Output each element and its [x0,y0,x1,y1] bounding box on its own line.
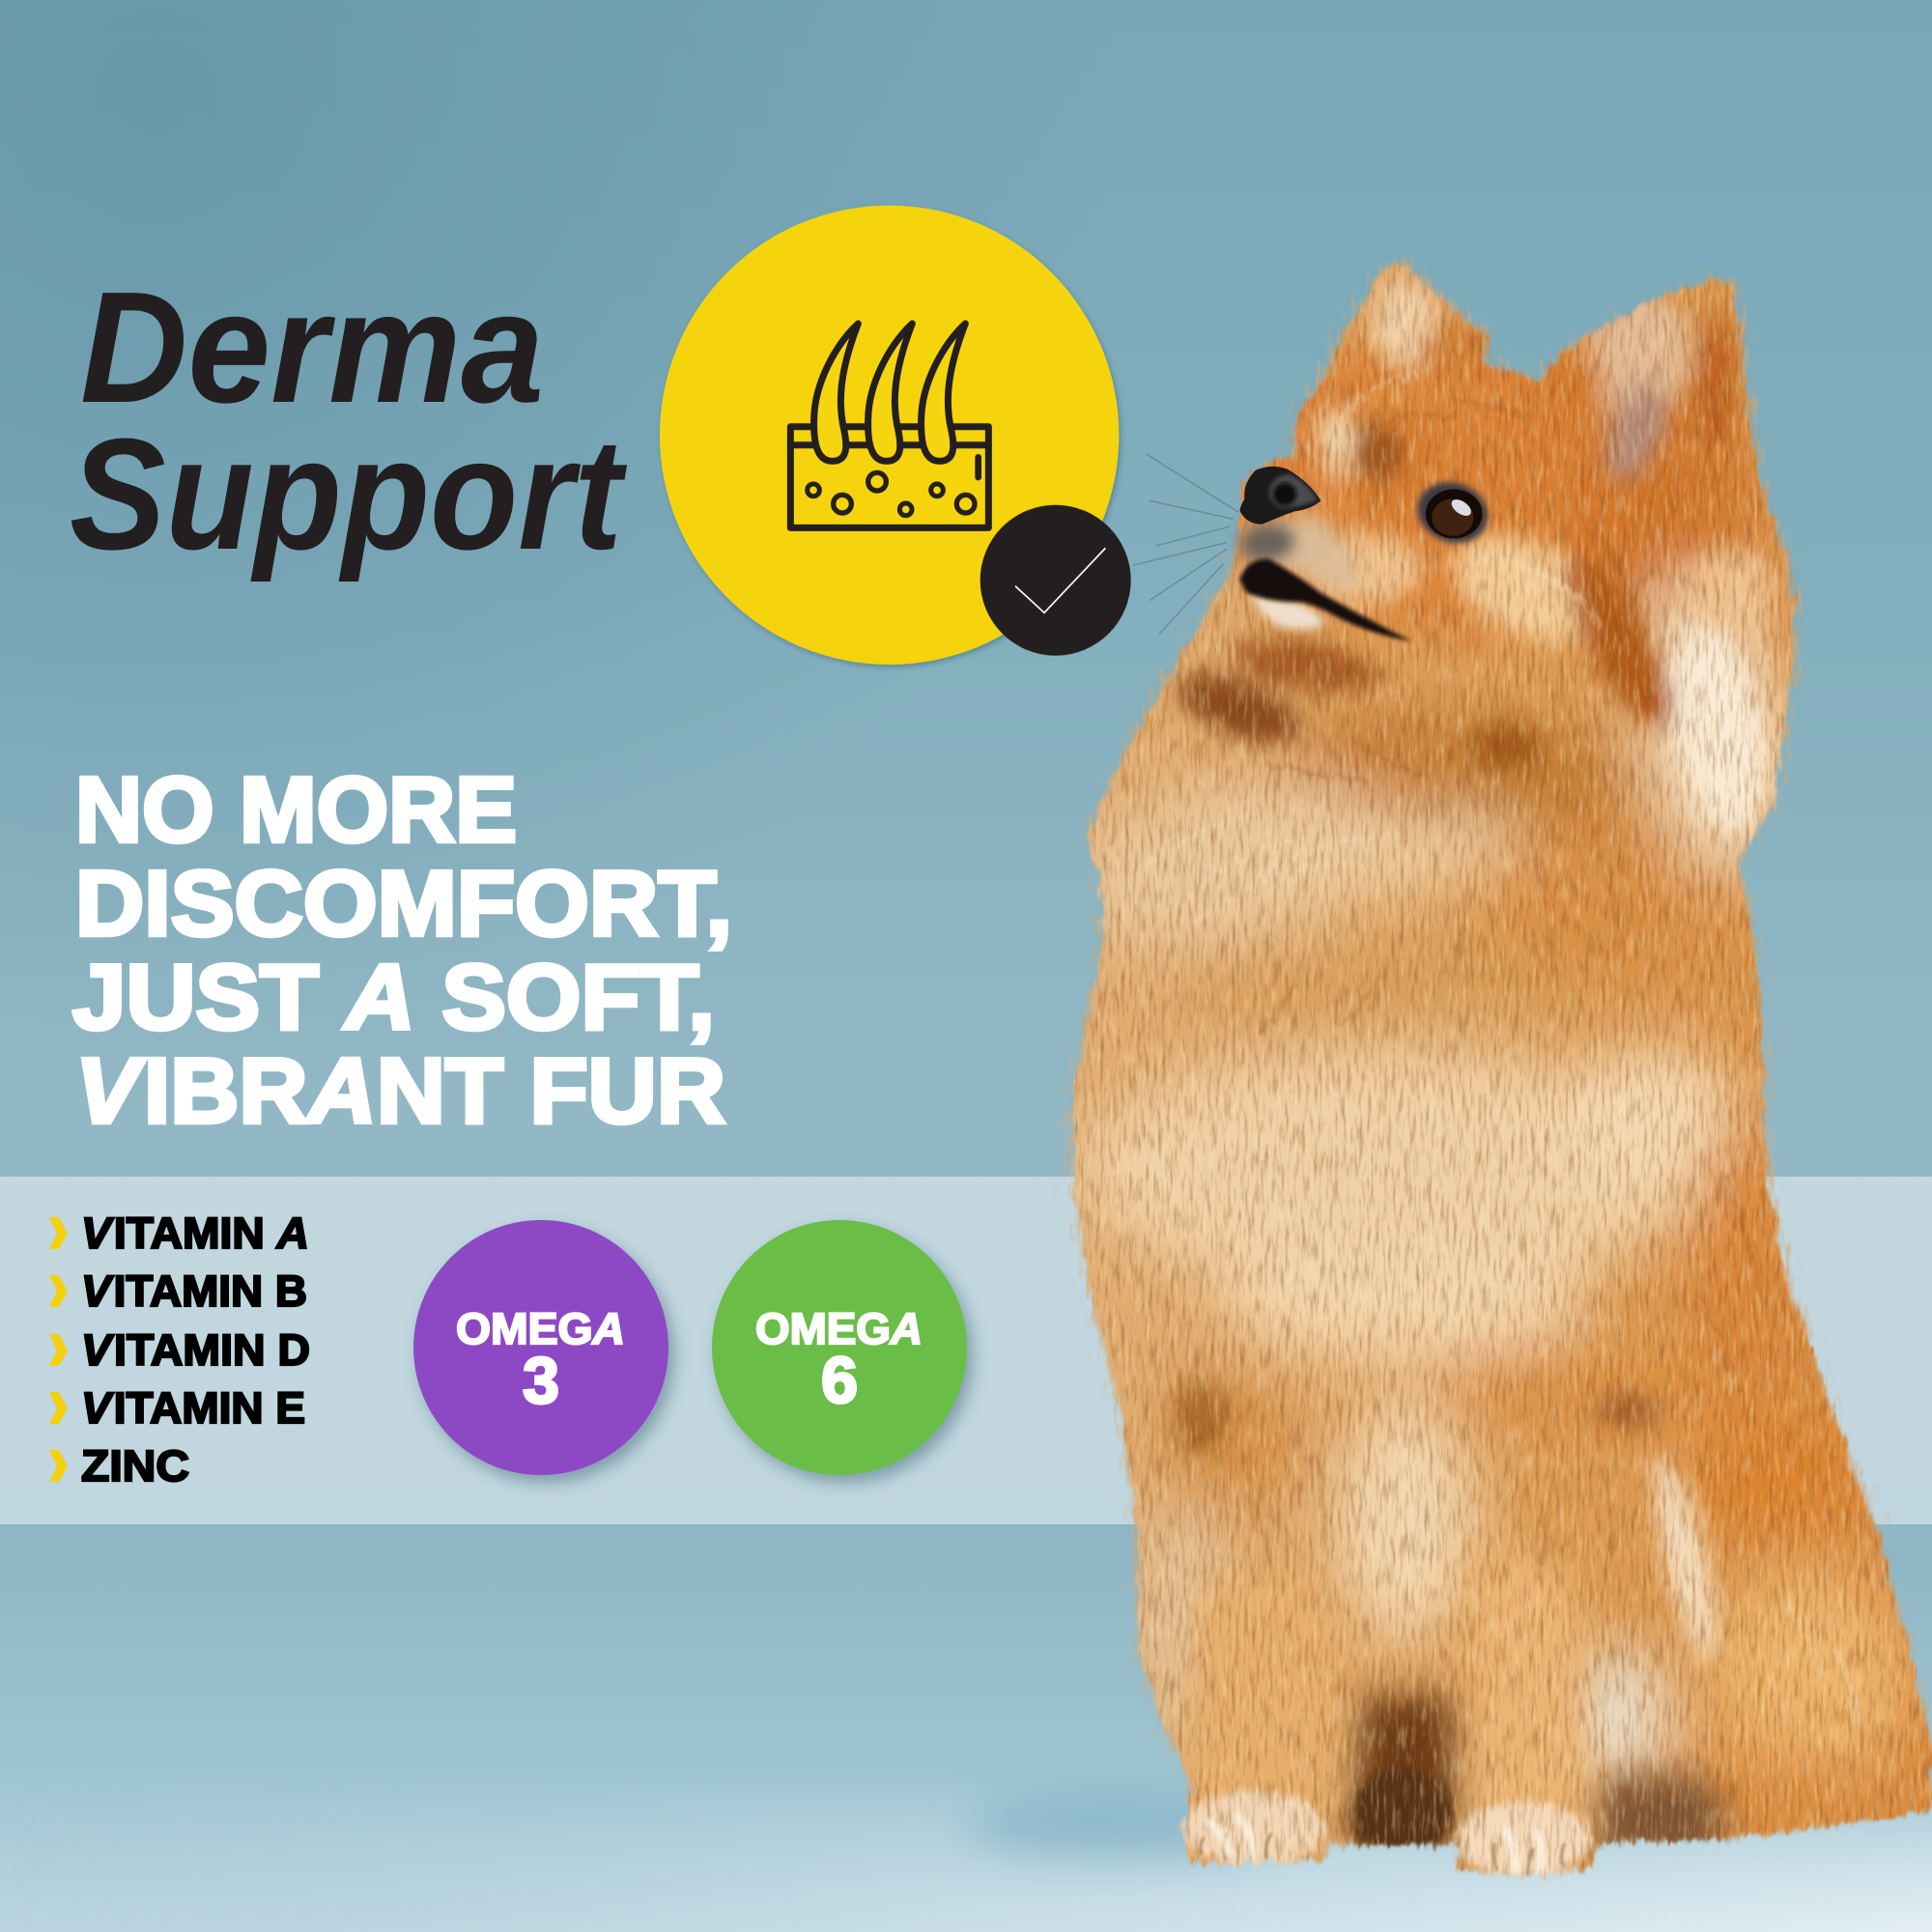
icon: skin with hair follicles [790,324,988,527]
fur strands [1133,296,1861,1811]
vitamin labels [81,1208,310,1491]
title: Derma Support: Support [70,406,628,582]
floor shadow under dog [966,1793,1275,1859]
fur body [1035,246,1932,1897]
check circle [980,505,1131,656]
nostril [1273,483,1296,506]
headline [72,758,732,1143]
nose highlight [1268,474,1318,508]
whiskers [1133,454,1238,635]
headline: JUST A SOFT, [72,946,715,1049]
muzzle grey [1237,521,1296,564]
omega 3 badge: 3 [523,1344,559,1417]
dog photo illustration [1035,246,1932,1897]
muzzle fur [1256,512,1362,592]
translucent ingredient band [0,1177,1932,1524]
headline: DISCOMFORT, [75,852,732,955]
yellow circle [660,206,1119,665]
check mark [1015,548,1105,612]
title: Derma Support [70,259,628,582]
omega 3 badge [413,1220,668,1475]
paw toes [1201,1833,1565,1875]
legs and underside [1187,1551,1725,1861]
eye [1409,472,1496,553]
title: Derma Support: Derma [80,259,544,436]
vitamin labels: VITAMIN E [81,1383,305,1433]
omega 6 badge: OMEGA [755,1304,923,1353]
mouth [1239,558,1412,641]
headline: NO MORE [75,758,517,862]
headline: VIBRANT FUR [75,1039,725,1143]
wispy fur halo [1072,267,1932,1799]
vitamin labels: ZINC [81,1441,189,1491]
nose [1239,467,1321,525]
omega 6 badge [712,1220,967,1475]
omega 6 badge: 6 [821,1344,858,1417]
dog muzzle and nose [1133,454,1412,641]
paw highlights [1208,1816,1541,1870]
vitamin labels: VITAMIN D [81,1325,310,1375]
vitamin labels: VITAMIN A [81,1208,309,1258]
chin [1251,592,1325,629]
ingredient list [49,1208,310,1491]
omega 3 badge: OMEGA [456,1304,625,1353]
chevrons [49,1217,68,1482]
vitamin labels: VITAMIN B [81,1266,307,1316]
skin and hair badge [660,206,1131,665]
